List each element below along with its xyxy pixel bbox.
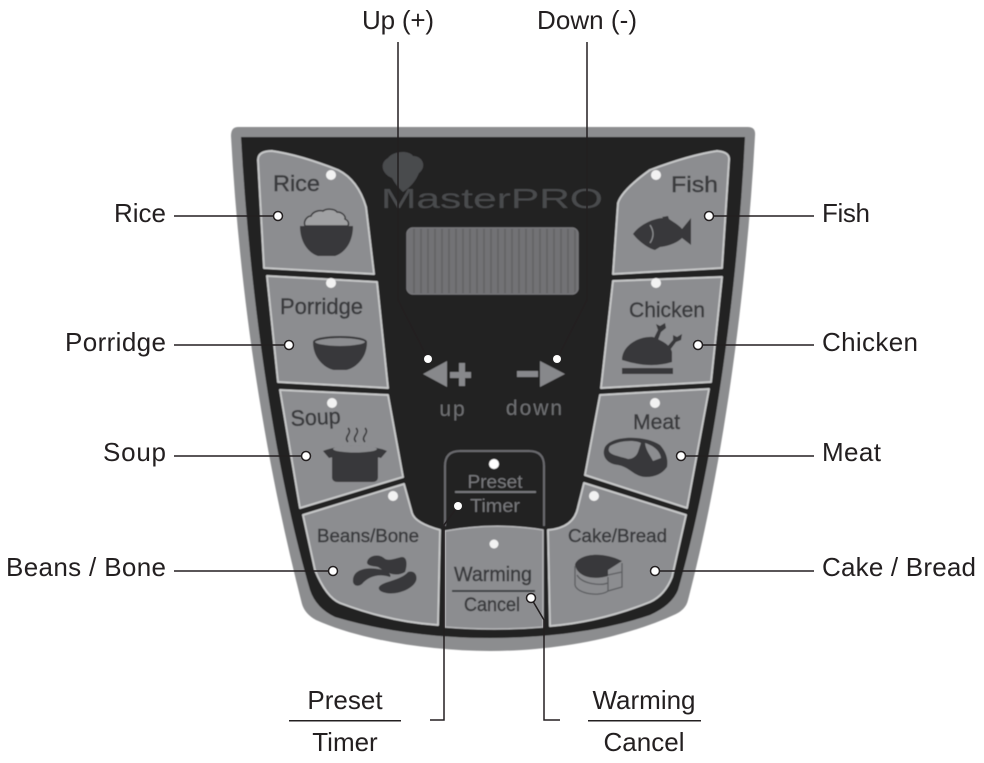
button: Chicken: Chicken	[629, 299, 705, 322]
down arrow button: down	[506, 397, 564, 420]
logo: MasterPRO	[381, 183, 603, 214]
icon: chef hat	[383, 152, 423, 192]
icon: beans	[353, 556, 417, 593]
button: Rice	[258, 151, 374, 274]
button: Preset/Timer	[445, 451, 544, 526]
button: Soup	[280, 390, 403, 508]
button: Meat	[585, 389, 709, 508]
down arrow button	[506, 361, 565, 420]
button: Warming/Cancel	[445, 526, 543, 629]
callout lines	[174, 42, 814, 720]
label: Preset / Timer: Preset	[307, 685, 383, 715]
icon: porridge bowl	[313, 337, 367, 370]
icon: steak	[604, 438, 667, 477]
panel: dark face	[241, 137, 745, 638]
label: Up: Up (+)	[362, 5, 434, 35]
up arrow button: up	[439, 398, 467, 421]
icon: fish	[633, 216, 691, 250]
button: Meat: Meat	[633, 411, 680, 434]
button: Preset/Timer: Preset	[468, 472, 522, 492]
label: Preset / Timer	[289, 685, 401, 757]
button: Fish	[613, 151, 729, 274]
logo	[381, 152, 603, 214]
label: Soup: Soup	[103, 437, 166, 467]
button: Fish: Fish	[671, 172, 718, 197]
button: Cake/Bread	[548, 483, 686, 626]
button: Rice: Rice	[273, 171, 320, 196]
button: Preset/Timer: Timer	[470, 496, 520, 516]
label: Preset / Timer: Timer	[312, 727, 378, 757]
label: Fish: Fish	[822, 198, 870, 228]
panel: outer grey bezel	[231, 127, 755, 651]
button: Porridge: Porridge	[280, 294, 363, 319]
button: Porridge	[267, 276, 388, 388]
label: Beans / Bone: Beans / Bone	[6, 552, 166, 582]
label: Warming / Cancel: Warming	[592, 685, 696, 715]
up arrow button	[423, 361, 471, 421]
icon: soup pot	[323, 428, 387, 482]
label: Porridge: Porridge	[65, 327, 166, 357]
label: Chicken: Chicken	[822, 327, 918, 357]
button: Chicken	[601, 277, 722, 388]
button: Cake/Bread: Cake/Bread	[568, 526, 667, 546]
label: Cake / Bread: Cake / Bread	[822, 552, 976, 582]
icon: cake	[575, 555, 622, 594]
button: Soup: Soup	[290, 403, 341, 431]
icon: rice bowl	[300, 209, 353, 256]
icon: roast chicken	[622, 323, 682, 374]
button: Warming/Cancel: Cancel	[464, 595, 520, 616]
button: Beans/Bone	[303, 484, 440, 625]
control panel	[231, 127, 755, 651]
label: Down: Down (-)	[537, 5, 637, 35]
label: Rice: Rice	[114, 198, 166, 228]
label: Warming / Cancel: Cancel	[604, 727, 684, 757]
label: Meat: Meat	[822, 437, 882, 467]
label: Warming / Cancel	[588, 685, 701, 757]
button LEDs	[326, 170, 661, 501]
button: Beans/Bone: Beans/Bone	[317, 526, 419, 546]
button: Warming/Cancel: Warming	[454, 564, 532, 586]
display screen	[407, 228, 578, 294]
